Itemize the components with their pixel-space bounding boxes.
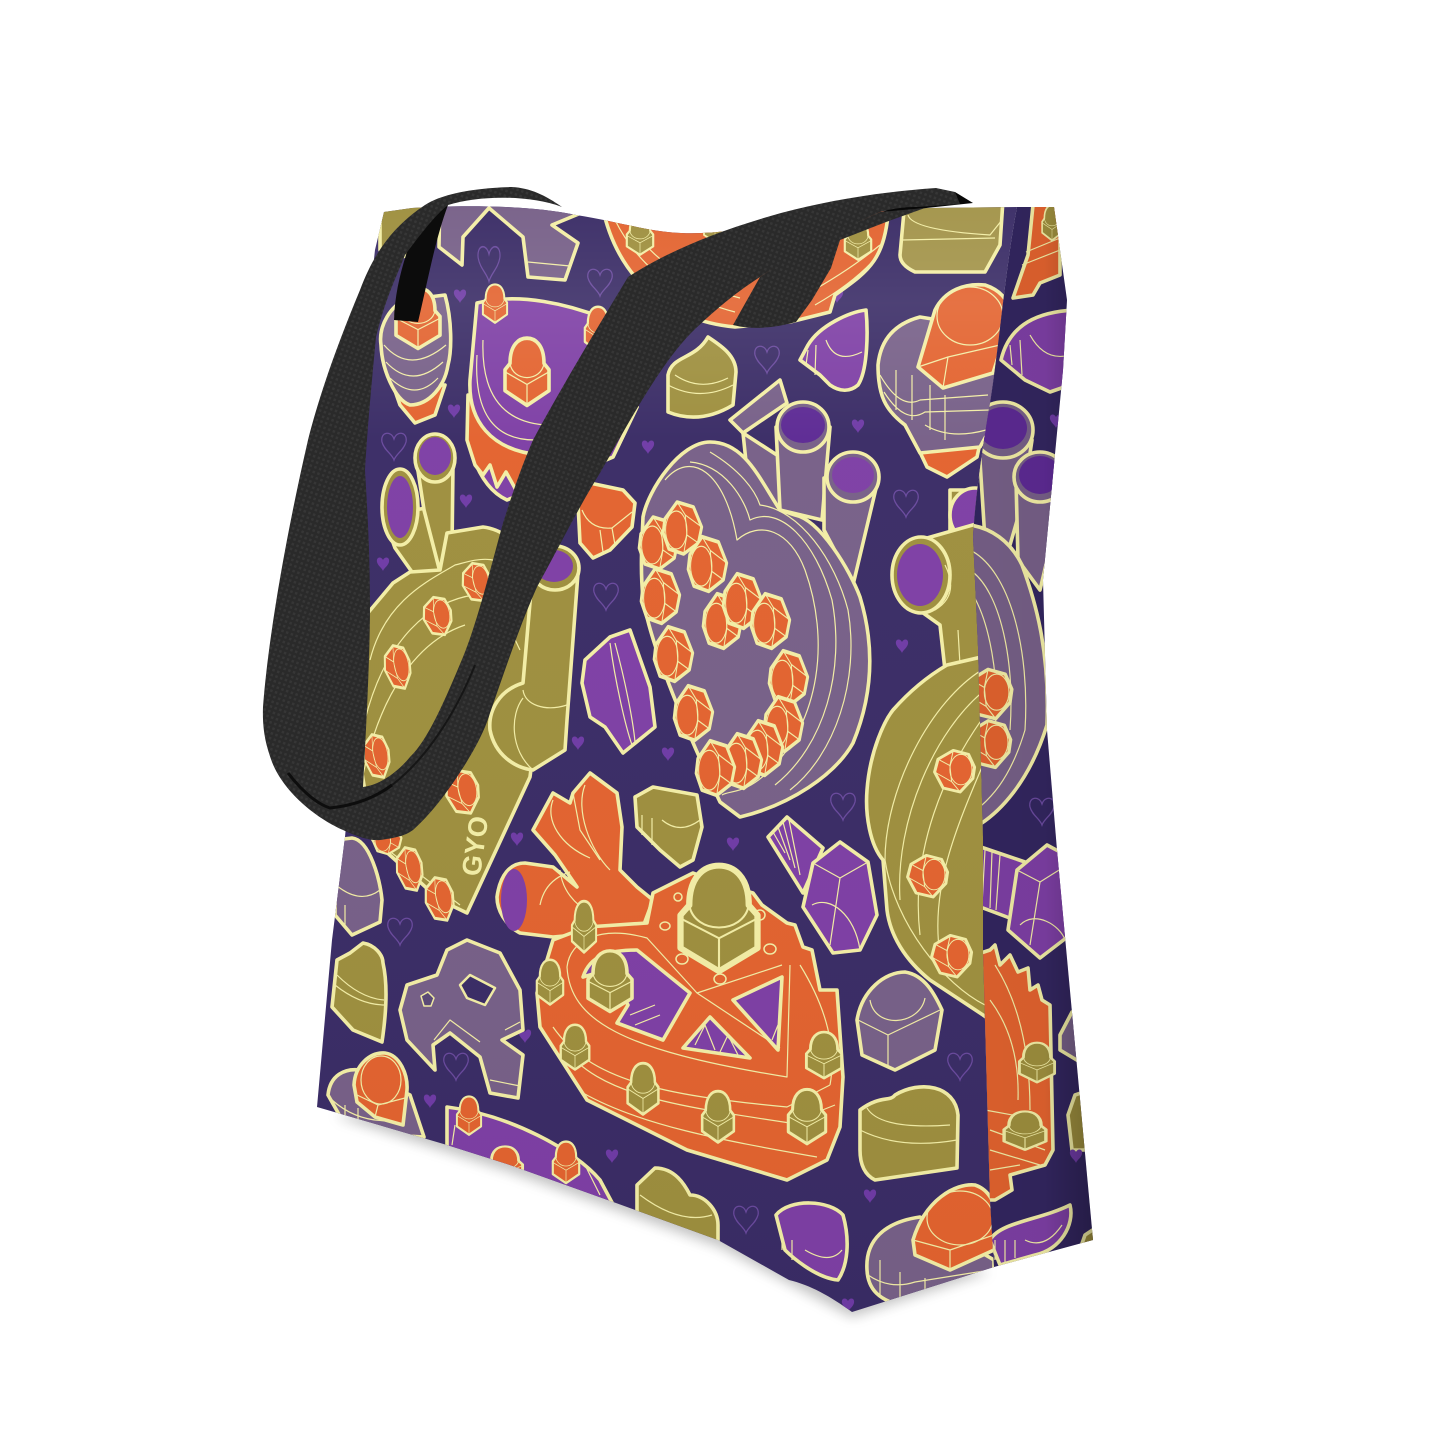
- olive flat heart: [860, 1087, 958, 1180]
- olive block heart top right: [900, 200, 1003, 272]
- orange bolts ring: [639, 502, 808, 795]
- lilac pipes side: [979, 400, 1055, 592]
- strap: right attachment tab: [733, 192, 973, 328]
- heart cutout windows: [583, 950, 782, 1058]
- olive heart right with pipes and bolts: [867, 488, 1000, 1020]
- small heart motifs: [377, 247, 972, 1312]
- lilac nut lower left: [335, 838, 382, 935]
- purple heart top side: [1001, 310, 1075, 392]
- lilac heart stack with orange acorn nut: [878, 285, 1008, 477]
- maker logo: GYO: [456, 814, 494, 878]
- bag front panel: [300, 190, 1020, 1320]
- purple bolt: [768, 817, 877, 953]
- purple heart bottom right: [776, 1203, 847, 1280]
- lilac stack with orange nut left: [381, 288, 451, 423]
- purple tube behind strap: [606, 406, 639, 462]
- olive heart near bolt: [635, 787, 702, 867]
- purple heart middle: [582, 630, 655, 753]
- olive heart lower left: [332, 943, 386, 1042]
- strap: main loop: [263, 187, 960, 840]
- small shapes at edge of side: [1060, 1000, 1100, 1255]
- shadow under bag: [335, 1110, 990, 1317]
- strap: inner black tab: [394, 205, 448, 322]
- olive small heart top: [668, 337, 736, 417]
- bag side panel: [973, 207, 1093, 1267]
- tote bag illustration: [262, 187, 1093, 1322]
- purple heart bottom side: [990, 1205, 1071, 1265]
- lilac stack and orange acorn bottom: [867, 1185, 997, 1305]
- purple heart top: [800, 310, 867, 390]
- olive heart left with pipes: [350, 434, 579, 923]
- olive block corner top left: [380, 205, 425, 257]
- purple arc bottom with nuts: [447, 1096, 616, 1210]
- lilac wrench lower: [400, 940, 523, 1098]
- lilac stack and orange acorn bottom left: [328, 1053, 424, 1137]
- purple bolt side: [983, 843, 1066, 960]
- orange heart middle: [578, 482, 635, 558]
- lilac heart with orange bolts: [639, 380, 879, 817]
- big orange heart with bolts: [497, 773, 843, 1180]
- orange arc at top with olive nuts: [602, 205, 889, 327]
- orange heart top side: [1013, 205, 1062, 298]
- lilac wrench top: [437, 206, 580, 282]
- lilac heart side: [967, 525, 1047, 830]
- big purple arc with gear: [467, 284, 640, 500]
- orange gear heart side: [975, 945, 1055, 1200]
- small side hearts: [1030, 415, 1082, 1163]
- lilac acorn nut: [857, 972, 942, 1070]
- olive heart bottom: [637, 1168, 718, 1245]
